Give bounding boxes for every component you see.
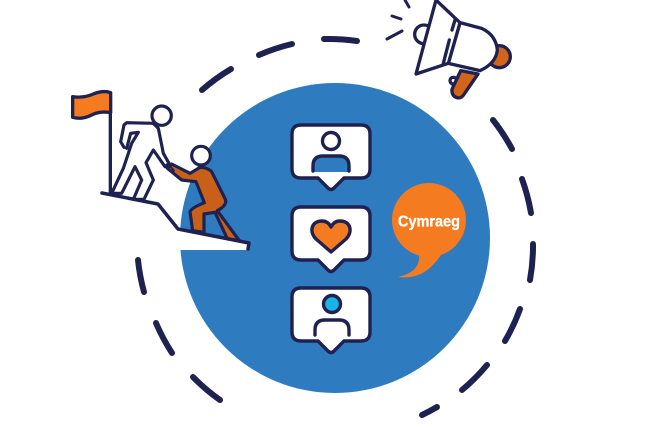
Cymraeg label: Cymraeg bbox=[398, 214, 460, 230]
blue central circle bbox=[180, 83, 490, 393]
speech bubble: heart bbox=[292, 207, 370, 272]
profile shoulders bbox=[313, 156, 349, 171]
dashed ring bbox=[138, 39, 533, 415]
person shoulders bbox=[315, 320, 349, 335]
orange climber cuff bbox=[170, 166, 174, 171]
speech bubble: person with blue head bbox=[292, 288, 370, 352]
Cymraeg bubble tail bbox=[398, 250, 444, 277]
speech bubble: profile bbox=[292, 125, 370, 190]
megaphone orange back bbox=[488, 46, 510, 68]
mountain ledge outline bbox=[102, 193, 249, 249]
white climber body bbox=[112, 123, 169, 199]
icon: megaphone rays bbox=[387, 0, 409, 39]
megaphone inner band bbox=[443, 20, 455, 63]
icon: megaphone bbox=[415, 0, 510, 98]
cyan head bbox=[324, 296, 340, 312]
flag bbox=[73, 92, 111, 118]
megaphone handle bbox=[452, 71, 478, 98]
white climber head bbox=[152, 106, 171, 125]
flag pole bbox=[105, 93, 115, 193]
flag and pole bbox=[73, 92, 111, 193]
megaphone rear cap bbox=[415, 25, 433, 44]
white climber bbox=[112, 106, 171, 199]
orange climber bbox=[167, 146, 239, 241]
profile shoulder fill bbox=[313, 156, 349, 172]
megaphone body bbox=[448, 23, 497, 71]
orange climber body bbox=[167, 164, 239, 241]
speech bubble: Cymraeg bbox=[392, 183, 466, 277]
megaphone cone bbox=[416, 0, 460, 74]
heart bbox=[312, 221, 350, 252]
megaphone knob bbox=[450, 77, 457, 84]
ledge white base bbox=[180, 229, 249, 250]
orange climber head bbox=[192, 146, 210, 165]
profile head bbox=[322, 132, 340, 150]
